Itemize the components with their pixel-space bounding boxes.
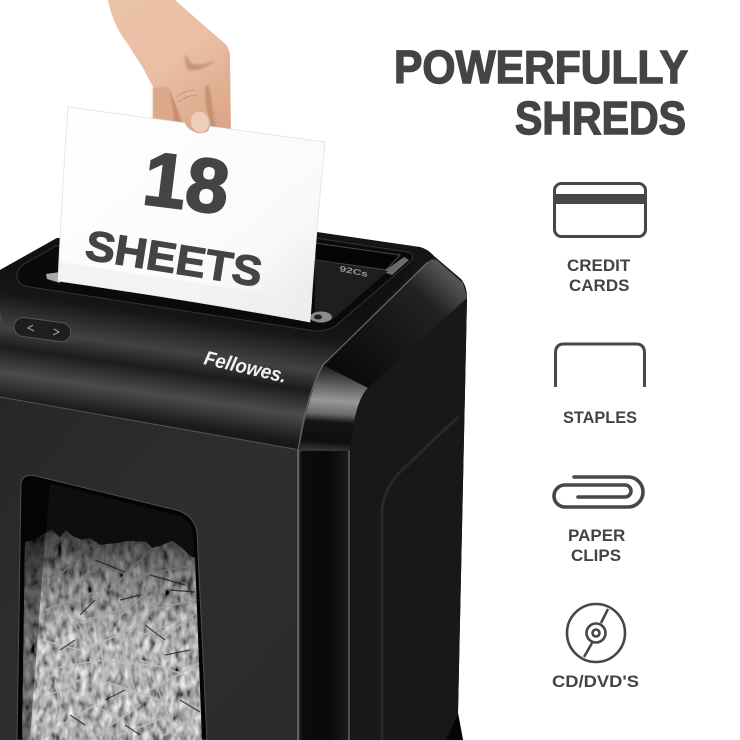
- control panel: [315, 260, 388, 320]
- side panel: [351, 298, 467, 740]
- tray recess: [315, 243, 400, 270]
- icon: disc: [567, 604, 625, 662]
- slot left metal: [46, 272, 60, 283]
- label: staples: STAPLES: [563, 408, 637, 427]
- button pill: [13, 316, 72, 343]
- pillar left highlight: [297, 451, 299, 740]
- front face: [0, 397, 300, 740]
- item: staples: [556, 344, 644, 427]
- knuckle creases: [176, 90, 197, 102]
- thumb shape: [167, 72, 211, 133]
- knuckle crease shadows: [185, 54, 216, 130]
- brand logo: Fellowes.: [202, 347, 289, 388]
- shredder body silhouette: [0, 232, 467, 740]
- number 18: 18: [139, 136, 234, 231]
- heading: POWERFULLY: [394, 41, 688, 93]
- hand with fingers behind paper: [108, 0, 231, 135]
- thumb nail: [189, 110, 211, 134]
- corner top facet: [323, 259, 467, 415]
- shredded paper pile: [15, 525, 210, 740]
- foot: [446, 714, 463, 740]
- paper tray rim: [17, 238, 413, 331]
- icon: paper clip: [554, 477, 643, 507]
- window upper sheen: [44, 483, 195, 575]
- heading: SHREDS: [515, 92, 686, 144]
- shadow between thumb and fingers: [170, 90, 182, 124]
- label: paper clips: PAPER: [568, 526, 625, 545]
- model label: 92Cs: [339, 264, 370, 279]
- left reflection strip: [22, 534, 46, 740]
- left edge control: [0, 313, 2, 324]
- thumb over paper: [167, 72, 211, 134]
- label: cd dvd: CD/DVD'S: [552, 672, 639, 691]
- icon: credit card: [554, 184, 646, 236]
- top curved panel: [0, 238, 420, 450]
- label: credit cards: CARDS: [569, 276, 629, 295]
- viewing window: [15, 475, 210, 740]
- side panel contour: [382, 416, 459, 740]
- label: credit cards: CREDIT: [567, 256, 631, 275]
- seam line of front panel: [0, 397, 300, 450]
- paper bottom fold: [58, 262, 312, 322]
- side pillar: [302, 451, 350, 740]
- hand shape: [108, 0, 231, 135]
- sheet of paper: [58, 107, 325, 322]
- heading: [394, 41, 688, 144]
- power button ring: [310, 312, 332, 322]
- item: credit cards: [554, 184, 646, 295]
- item: cds and dvds: [552, 604, 639, 691]
- icon: staple: [556, 344, 644, 387]
- corner gloss highlight: [300, 365, 368, 452]
- pillar right highlight: [348, 451, 350, 740]
- label: paper clips: CLIPS: [571, 546, 621, 565]
- corner edge line: [298, 262, 428, 452]
- paper sheet: [58, 107, 325, 322]
- item: paper clips: [554, 477, 643, 565]
- shredder machine: [0, 232, 467, 740]
- window frame: [17, 475, 207, 740]
- finger shading: [153, 86, 172, 122]
- pile top shadow: [24, 530, 198, 632]
- word sheets: SHEETS: [82, 221, 266, 296]
- tray right gloss tab: [383, 257, 409, 275]
